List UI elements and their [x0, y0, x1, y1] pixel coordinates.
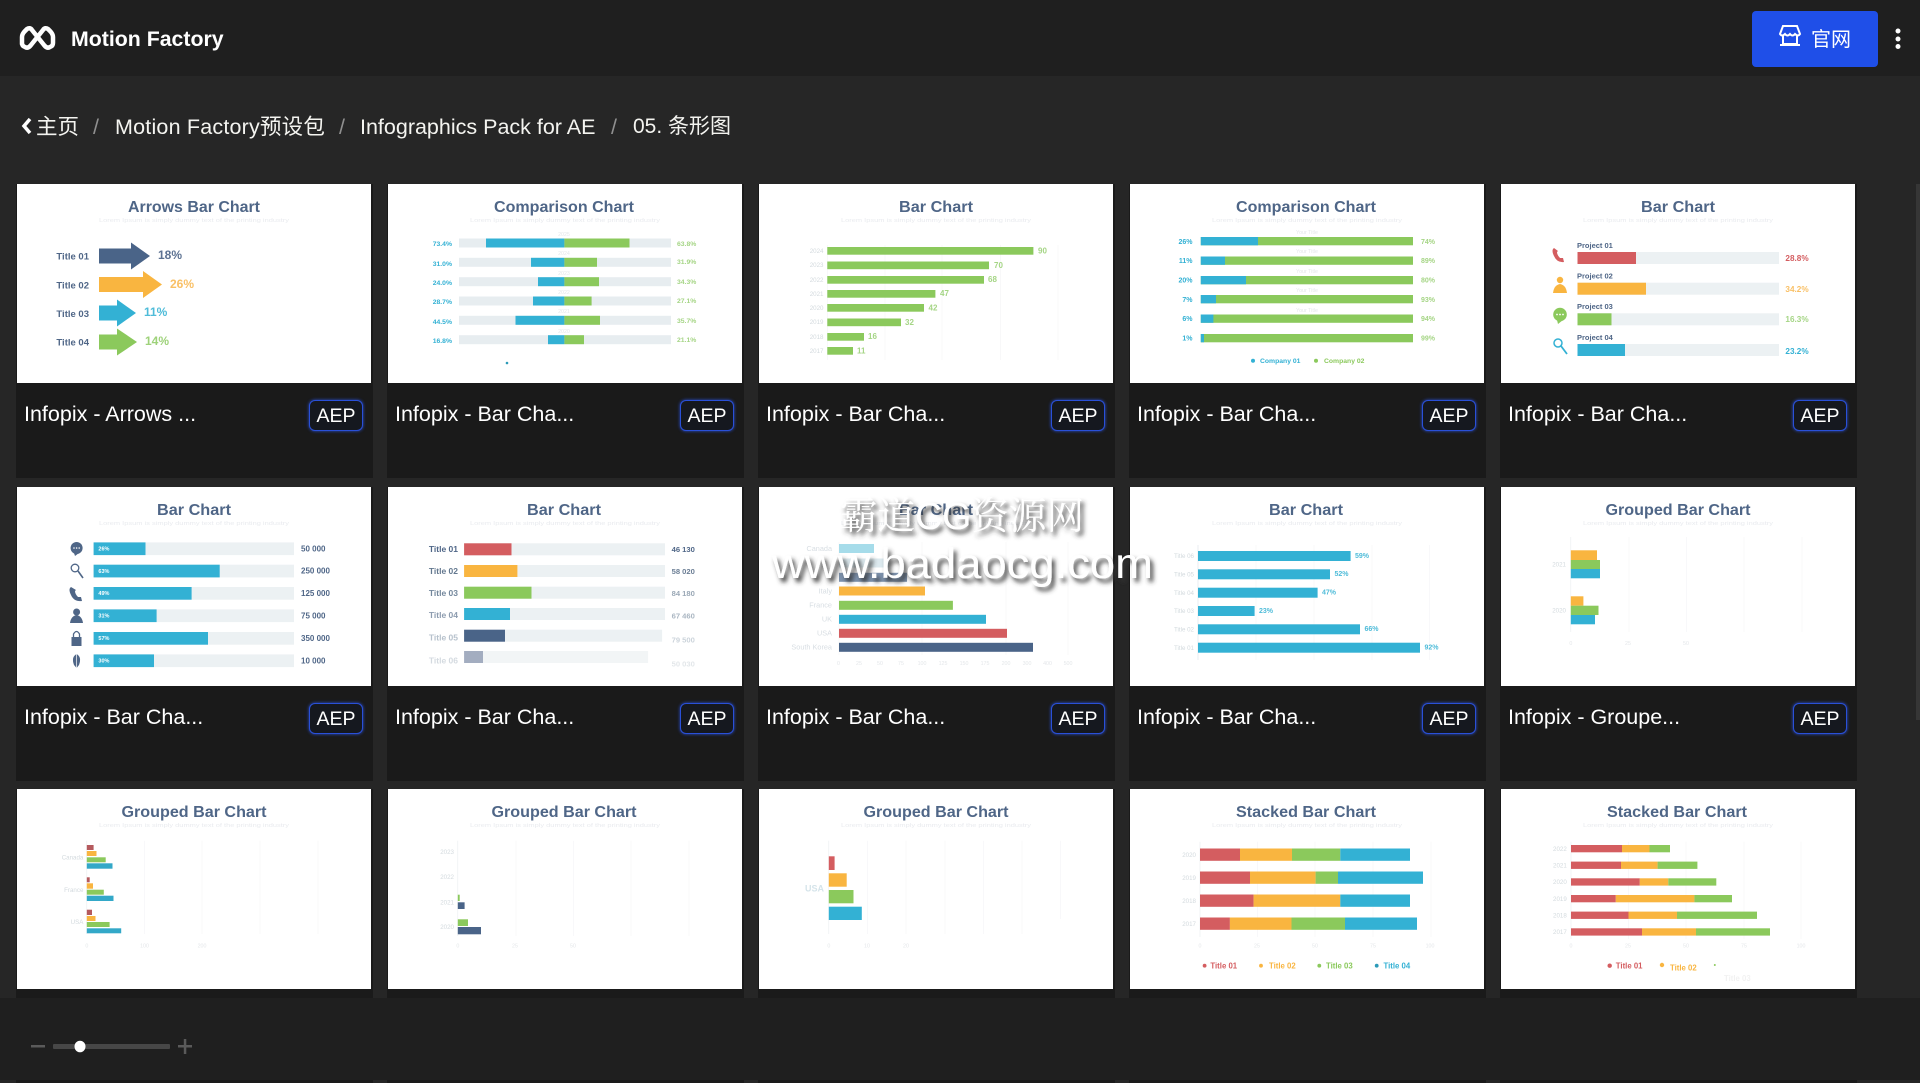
- icon: more menu: [1896, 28, 1900, 49]
- chart: green bars by year: 2023: [810, 262, 824, 269]
- chart: multi colour titled bars: Title 02: [429, 566, 458, 576]
- chart: countries multi colour bars: Italy: [819, 586, 832, 596]
- chart: green bars by year: [759, 184, 1113, 383]
- chart: grouped bars 2021 and 2020: [1501, 487, 1855, 686]
- chart: centered comparison bars: 2024: [558, 251, 570, 257]
- chart: two company comparison: 80%: [1421, 278, 1436, 284]
- chart: two company comparison: 74%: [1421, 239, 1436, 246]
- chart: blue percent bars with icons: 75 000: [301, 612, 326, 620]
- card: arrows bar chart: [16, 184, 373, 478]
- chart: grouped bars single USA group: 20: [903, 944, 909, 950]
- AEP badge: AEP: [687, 405, 727, 427]
- button label: 官网: [1811, 29, 1851, 51]
- chart: green bars by year: 11: [857, 346, 866, 356]
- chart title: Bar Chart: [527, 502, 601, 519]
- chart: countries multi colour bars: 25: [856, 661, 862, 667]
- AEP badge: AEP: [1058, 708, 1098, 730]
- chart: green bars by year: 90: [1038, 246, 1047, 256]
- chart: blue percent bars with icons: 250 000: [301, 566, 330, 576]
- chart: stacked bars 2017 to 2020: 2018: [1182, 898, 1197, 905]
- chart: grouped bars single USA group: 0: [827, 944, 830, 950]
- bottom zoom bar: [0, 998, 1920, 1080]
- chart: centered comparison bars: 2022: [558, 290, 570, 296]
- chart: two company comparison: Your Title: [1296, 288, 1318, 294]
- chart: arrows bar chart: Lorem Ipsum is simply dummy text of the printing industry: [99, 218, 290, 224]
- chart: blue percent bars with icons: 50 000: [301, 544, 326, 554]
- chart: project bars with icons: 28.8%: [1785, 254, 1809, 263]
- chart: green bars by year: 70: [994, 261, 1003, 270]
- chart: multi colour titled bars: 58 020: [672, 567, 695, 576]
- chart: grouped bars single USA group: USA: [805, 884, 824, 894]
- chart: arrows bar chart: Title 04: [56, 338, 90, 348]
- chart: blue bars with percent: [1130, 487, 1484, 686]
- chart: stacked bars 2017 to 2022: Title 01: [1616, 962, 1643, 970]
- chart: green bars by year: 2020: [810, 305, 824, 312]
- chart: centered comparison bars: 73.4%: [433, 241, 452, 248]
- separator: /: [93, 115, 99, 139]
- chart: multi colour titled bars: 79 500: [672, 636, 695, 644]
- chart: project bars with icons: Project 01: [1577, 241, 1613, 250]
- chart: grouped bars Canada France USA: [17, 789, 371, 989]
- chart: multi colour titled bars: [388, 487, 742, 686]
- chart: blue bars with percent: 59%: [1355, 553, 1370, 560]
- logo icon: [20, 26, 56, 50]
- chart: blue percent bars with icons: 49%: [98, 591, 110, 597]
- chart: multi colour titled bars: Lorem Ipsum is simply dummy text of the printing industry: [470, 521, 661, 527]
- chart title: Comparison Chart: [1236, 199, 1376, 216]
- chart: blue bars with percent: 23%: [1259, 608, 1274, 615]
- chart: arrows bar chart: 14%: [145, 334, 169, 348]
- chart: two company comparison: Your Title: [1296, 308, 1318, 314]
- card title: Infopix - Groupe...: [1508, 705, 1680, 729]
- chart: green bars by year: 2022: [810, 277, 824, 284]
- chart: centered comparison bars: Lorem Ipsum is simply dummy text of the printing industry: [470, 218, 661, 224]
- chart title: Bar Chart: [899, 199, 973, 216]
- chart: grouped bars Canada France USA: Lorem Ipsum is simply dummy text of the printing industry: [99, 823, 290, 829]
- chart: stacked bars 2017 to 2020: 2017: [1182, 921, 1197, 928]
- card: stacked bars four series: [1129, 789, 1486, 1083]
- chart: multi colour titled bars: Title 04: [429, 610, 458, 620]
- chart: stacked bars 2017 to 2020: 50: [1312, 944, 1318, 950]
- chart: centered comparison bars: 24.0%: [433, 280, 452, 287]
- chart: project bars with icons: Project 04: [1577, 333, 1614, 342]
- AEP badge: [1422, 703, 1476, 734]
- AEP badge: AEP: [316, 405, 356, 427]
- icon: back chevron: [22, 118, 32, 134]
- chart title: Bar Chart: [899, 502, 973, 519]
- chart: two company comparison: 11%: [1179, 258, 1193, 265]
- AEP badge: [1051, 703, 1105, 734]
- chart: stacked bars 2017 to 2020: 25: [1254, 944, 1260, 950]
- chart: blue bars with percent: Title 01: [1174, 645, 1195, 652]
- chart: arrows bar chart: [17, 184, 371, 383]
- chart: blue bars with percent: 52%: [1334, 571, 1349, 578]
- chart title: Grouped Bar Chart: [1606, 502, 1750, 519]
- chart: stacked bars 2017 to 2022: 100: [1797, 944, 1805, 950]
- chart: centered comparison bars: 2025: [558, 232, 570, 238]
- AEP badge: [680, 703, 734, 734]
- chart: multi colour titled bars: 84 180: [672, 589, 695, 598]
- chart: blue percent bars with icons: 30%: [98, 658, 110, 664]
- chart: multi colour titled bars: 67 460: [672, 612, 695, 620]
- chart title: Grouped Bar Chart: [122, 804, 266, 821]
- chart: green bars by year: 2018: [810, 334, 824, 341]
- card: stacked bars three series: [1500, 789, 1857, 1083]
- chart: grouped bars 2021 and 2020: Lorem Ipsum is simply dummy text of the printing industry: [1583, 521, 1774, 527]
- chart: grouped bars 2020 to 2023: 2022: [440, 874, 455, 881]
- chart: stacked bars 2017 to 2022: 2022: [1553, 846, 1567, 853]
- chart: grouped bars 2020 to 2023: 50: [570, 944, 576, 950]
- chart: grouped bars 2021 and 2020: 2021: [1552, 562, 1567, 568]
- chart: stacked bars 2017 to 2020: Title 04: [1384, 962, 1411, 970]
- chart: green bars by year: 2021: [810, 291, 824, 298]
- chart: two company comparison: 6%: [1182, 316, 1193, 323]
- chart: centered comparison bars: 28.7%: [433, 299, 452, 306]
- chart: grouped bars 2020 to 2023: Lorem Ipsum is simply dummy text of the printing industry: [470, 823, 661, 829]
- chart: arrows bar chart: Title 03: [56, 309, 89, 320]
- chart: centered comparison bars: 31.0%: [433, 261, 452, 268]
- chart: blue percent bars with icons: 57%: [98, 636, 110, 642]
- AEP badge: [309, 703, 363, 734]
- chart title: Grouped Bar Chart: [864, 804, 1008, 821]
- chart: green bars by year: 16: [868, 332, 877, 341]
- scrollbar: [1916, 184, 1920, 720]
- chart: centered comparison bars: 2021: [558, 309, 570, 315]
- chart: grouped bars 2021 and 2020: 2020: [1552, 608, 1567, 614]
- chart: blue percent bars with icons: [17, 487, 371, 686]
- chart: project bars with icons: [1501, 184, 1855, 383]
- chart: two company comparison: 89%: [1421, 258, 1436, 265]
- chart: countries multi colour bars: 75: [898, 661, 904, 667]
- chart: centered comparison bars: 44.5%: [433, 319, 452, 326]
- card: country bar chart: [758, 487, 1115, 781]
- chart: grouped bars 2020 to 2023: 2023: [440, 849, 455, 856]
- AEP badge: AEP: [1429, 708, 1469, 730]
- chart: countries multi colour bars: Canada: [806, 544, 833, 553]
- chart: grouped bars 2021 and 2020: 0: [1569, 641, 1572, 647]
- card: grouped bars by year: [387, 789, 744, 1083]
- card: blue title bars 1: [1129, 487, 1486, 781]
- AEP badge: AEP: [687, 708, 727, 730]
- chart: multi colour titled bars: Title 01: [429, 544, 458, 554]
- AEP badge: AEP: [1800, 708, 1840, 730]
- chart: two company comparison: 26%: [1178, 239, 1193, 246]
- chart: blue bars with percent: 92%: [1424, 644, 1439, 652]
- chart: blue bars with percent: Title 04: [1174, 590, 1195, 597]
- card title: Infopix - Bar Cha...: [1508, 402, 1687, 426]
- chart: grouped bars 2020 to 2023: [388, 789, 742, 989]
- breadcrumb pack: Motion Factory预设包: [115, 115, 325, 139]
- chart: stacked bars 2017 to 2022: 2019: [1553, 896, 1567, 903]
- chart: green bars by year: 2019: [810, 319, 824, 326]
- chart: green bars by year: 32: [905, 318, 914, 327]
- chart: centered comparison bars: 63.8%: [677, 241, 696, 248]
- card title: Infopix - Arrows ...: [24, 402, 196, 426]
- AEP badge: [680, 400, 734, 431]
- chart: countries multi colour bars: UK: [822, 614, 832, 624]
- chart: multi colour titled bars: Title 03: [429, 588, 458, 598]
- chart: project bars with icons: Lorem Ipsum is simply dummy text of the printing industry: [1583, 218, 1774, 224]
- chart: blue percent bars with icons: 31%: [98, 614, 110, 620]
- chart: green bars by year: 2017: [810, 348, 824, 355]
- chart: grouped bars Canada France USA: 200: [198, 944, 206, 950]
- chart: multi colour titled bars: Title 06: [429, 656, 458, 666]
- chart: grouped bars 2021 and 2020: 25: [1625, 641, 1631, 647]
- card title: Infopix - Bar Cha...: [766, 402, 945, 426]
- chart: stacked bars 2017 to 2020: Title 03: [1326, 962, 1353, 970]
- chart: stacked bars 2017 to 2020: 100: [1426, 944, 1434, 950]
- chart: stacked bars 2017 to 2022: 2018: [1553, 912, 1567, 920]
- chart: stacked bars 2017 to 2022: Title 02: [1670, 964, 1697, 972]
- chart: two company comparison: 1%: [1182, 336, 1193, 342]
- chart: stacked bars 2017 to 2022: 2020: [1553, 879, 1567, 886]
- chart: centered comparison bars: 21.1%: [677, 337, 696, 344]
- chart: blue bars with percent: 47%: [1322, 590, 1337, 596]
- chart: centered comparison bars: 2023: [558, 271, 570, 277]
- card: fading multi-colour bars: [387, 487, 744, 781]
- chart: countries multi colour bars: USA: [817, 628, 832, 638]
- chart: two company comparison: Your Title: [1296, 249, 1318, 255]
- chart: blue bars with percent: 66%: [1364, 626, 1379, 633]
- top navigation bar: [0, 0, 1920, 76]
- chart: stacked bars 2017 to 2022: 50: [1683, 944, 1689, 950]
- chart: two company comparison: 93%: [1421, 297, 1436, 304]
- chart: two company comparison: 99%: [1421, 336, 1436, 342]
- chart title: Bar Chart: [1641, 199, 1715, 216]
- chart: centered comparison bars: 16.8%: [433, 338, 452, 345]
- chart: grouped bars Canada France USA: Canada: [62, 854, 84, 862]
- chart: arrows bar chart: Title 02: [56, 280, 89, 292]
- chart: two company comparison: 94%: [1421, 316, 1436, 323]
- chart: grouped bars 2021 and 2020: 50: [1683, 641, 1689, 647]
- chart: countries multi colour bars: South Korea: [791, 642, 833, 652]
- chart: countries multi colour bars: 500: [1064, 661, 1072, 667]
- chart: blue bars with percent: Title 05: [1174, 572, 1195, 578]
- chart: countries multi colour bars: 100: [918, 661, 926, 667]
- website button: [1752, 11, 1878, 67]
- chart: two company comparison: 20%: [1178, 278, 1193, 284]
- AEP badge: AEP: [1058, 405, 1098, 427]
- chart: centered comparison bars: 35.7%: [677, 318, 696, 325]
- card: comparison chart 2: [1129, 184, 1486, 478]
- chart: stacked bars 2017 to 2022: 2021: [1553, 862, 1567, 870]
- chart: blue percent bars with icons: 10 000: [301, 656, 326, 666]
- chart: stacked bars 2017 to 2020: Title 01: [1210, 962, 1238, 970]
- chart: blue bars with percent: Title 02: [1174, 626, 1195, 634]
- chart: two company comparison: Lorem Ipsum is simply dummy text of the printing industry: [1212, 218, 1403, 224]
- chart: grouped bars 2020 to 2023: 25: [512, 944, 518, 950]
- card title: Infopix - Bar Cha...: [395, 705, 574, 729]
- chart: stacked bars 2017 to 2020: Lorem Ipsum is simply dummy text of the printing industry: [1212, 823, 1403, 829]
- chart: project bars with icons: 23.2%: [1785, 347, 1809, 356]
- chart: stacked bars 2017 to 2022: [1501, 789, 1855, 989]
- chart: project bars with icons: 34.2%: [1785, 285, 1809, 294]
- card title: Infopix - Bar Cha...: [766, 705, 945, 729]
- chart: grouped bars Canada France USA: USA: [71, 919, 84, 926]
- zoom slider: [31, 1039, 192, 1054]
- chart: centered comparison bars: 27.1%: [677, 298, 696, 305]
- chart: two company comparison: Company 01: [1260, 358, 1301, 365]
- chart: stacked bars 2017 to 2022: 25: [1625, 944, 1631, 950]
- chart: grouped bars Canada France USA: 100: [140, 944, 149, 950]
- card title: Infopix - Bar Cha...: [1137, 402, 1316, 426]
- card: grouped bars by country: [16, 789, 373, 1083]
- chart: stacked bars 2017 to 2020: Title 02: [1269, 962, 1296, 970]
- AEP badge: AEP: [1800, 405, 1840, 427]
- card: grouped bar chart 1: [1500, 487, 1857, 781]
- chart: stacked bars 2017 to 2022: Title 03: [1724, 974, 1751, 983]
- chart: arrows bar chart: 11%: [144, 305, 168, 319]
- chart title: Arrows Bar Chart: [128, 199, 260, 216]
- chart: blue bars with percent: Title 06: [1174, 553, 1195, 560]
- chart: stacked bars 2017 to 2020: 0: [1199, 944, 1202, 950]
- chart: countries multi colour bars: France: [809, 600, 832, 610]
- chart: countries multi colour bars: [759, 487, 1113, 686]
- card: comparison chart 1: [387, 184, 744, 478]
- chart: centered comparison bars: 31.9%: [677, 259, 696, 266]
- card: grouped bars USA: [758, 789, 1115, 1083]
- breadcrumb infographics: Infographics Pack for AE: [360, 115, 595, 139]
- AEP badge: [309, 400, 363, 431]
- breadcrumb home: 主页: [36, 115, 79, 139]
- card title: Infopix - Bar Cha...: [395, 402, 574, 426]
- chart: centered comparison bars: [388, 184, 742, 383]
- chart: stacked bars 2017 to 2020: 2020: [1182, 852, 1197, 859]
- card title: Infopix - Bar Cha...: [24, 705, 203, 729]
- chart: grouped bars 2020 to 2023: 2020: [440, 924, 455, 931]
- chart: blue percent bars with icons: 26%: [98, 546, 110, 552]
- chart: countries multi colour bars: 300: [1023, 661, 1031, 667]
- chart: blue percent bars with icons: 125 000: [301, 589, 330, 598]
- chart title: Bar Chart: [157, 502, 231, 519]
- AEP badge: [1793, 703, 1847, 734]
- chart: arrows bar chart: 26%: [170, 277, 194, 291]
- card title: Infopix - Bar Cha...: [1137, 705, 1316, 729]
- watermark: www.badaocg.com: [771, 540, 1153, 588]
- chart: grouped bars 2020 to 2023: 2021: [440, 899, 455, 906]
- AEP badge: AEP: [1429, 405, 1469, 427]
- chart: multi colour titled bars: 50 030: [672, 660, 695, 668]
- AEP badge: [1051, 400, 1105, 431]
- chart: two company comparison: Your Title: [1296, 230, 1318, 236]
- chart title: Grouped Bar Chart: [492, 804, 636, 821]
- chart title: Stacked Bar Chart: [1607, 804, 1747, 821]
- chart: stacked bars 2017 to 2022: 2017: [1553, 929, 1567, 936]
- chart: project bars with icons: 16.3%: [1785, 315, 1809, 324]
- chart: arrows bar chart: Title 01: [56, 252, 90, 262]
- card: blue bars with icons: [16, 487, 373, 781]
- chart: blue percent bars with icons: 63%: [98, 569, 110, 575]
- chart: stacked bars 2017 to 2022: 0: [1570, 944, 1573, 950]
- chart: grouped bars single USA group: Lorem Ipsum is simply dummy text of the printing industry: [841, 823, 1032, 829]
- AEP badge: [1422, 400, 1476, 431]
- chart: centered comparison bars: 34.3%: [677, 279, 696, 286]
- chart: grouped bars single USA group: [759, 789, 1113, 989]
- icon: store: [1778, 25, 1802, 46]
- chart: countries multi colour bars: 200: [1002, 661, 1010, 667]
- watermark: 霸道CG资源网: [840, 496, 1084, 538]
- chart: blue percent bars with icons: Lorem Ipsum is simply dummy text of the printing industry: [99, 521, 290, 527]
- chart: stacked bars 2017 to 2020: 2019: [1182, 875, 1197, 882]
- chart: two company comparison: Your Title: [1296, 269, 1318, 275]
- chart: countries multi colour bars: 150: [960, 661, 968, 667]
- chart: countries multi colour bars: 175: [981, 661, 989, 667]
- brand name: Motion Factory: [71, 27, 224, 51]
- chart title: Comparison Chart: [494, 199, 634, 216]
- chart: green bars by year: 47: [940, 289, 949, 298]
- chart: grouped bars Canada France USA: France: [64, 887, 84, 894]
- chart: centered comparison bars: 2020: [558, 329, 570, 335]
- separator: /: [339, 115, 345, 139]
- chart: project bars with icons: Project 02: [1577, 272, 1613, 280]
- chart: countries multi colour bars: 400: [1043, 661, 1052, 667]
- chart: two company comparison: 7%: [1182, 297, 1193, 304]
- chart: arrows bar chart: 18%: [158, 248, 182, 262]
- chart: grouped bars single USA group: 10: [864, 944, 870, 950]
- chart: stacked bars 2017 to 2022: Lorem Ipsum is simply dummy text of the printing industry: [1583, 823, 1774, 829]
- AEP badge: AEP: [316, 708, 356, 730]
- card: project bar chart with icons: [1500, 184, 1857, 478]
- chart: blue bars with percent: Title 03: [1174, 608, 1195, 615]
- chart: countries multi colour bars: Lorem Ipsum is simply dummy text of the printing industry: [841, 521, 1032, 527]
- chart: stacked bars 2017 to 2022: 75: [1741, 944, 1747, 950]
- chart: stacked bars 2017 to 2020: [1130, 789, 1484, 989]
- chart: stacked bars 2017 to 2020: 75: [1370, 944, 1376, 950]
- AEP badge: [1793, 400, 1847, 431]
- separator: /: [611, 115, 617, 139]
- breadcrumb current: 05. 条形图: [633, 115, 731, 138]
- card: green bar chart: [758, 184, 1115, 478]
- chart: multi colour titled bars: Title 05: [429, 632, 458, 642]
- chart: multi colour titled bars: 46 130: [672, 545, 695, 554]
- chart: blue bars with percent: Lorem Ipsum is simply dummy text of the printing industry: [1212, 521, 1403, 527]
- chart: countries multi colour bars: 125: [939, 661, 947, 667]
- chart: countries multi colour bars: 50: [877, 661, 883, 667]
- chart title: Bar Chart: [1269, 502, 1343, 519]
- chart: grouped bars Canada France USA: 0: [85, 944, 88, 950]
- chart title: Stacked Bar Chart: [1236, 804, 1376, 821]
- chart: grouped bars 2020 to 2023: 0: [456, 944, 459, 950]
- chart: two company comparison: Company 02: [1324, 358, 1365, 365]
- chart: project bars with icons: Project 03: [1577, 302, 1613, 311]
- chart: green bars by year: Lorem Ipsum is simply dummy text of the printing industry: [841, 218, 1032, 224]
- chart: green bars by year: 2024: [810, 248, 824, 255]
- breadcrumb: [22, 115, 731, 139]
- chart: green bars by year: 42: [928, 304, 938, 312]
- chart: countries multi colour bars: 0: [837, 661, 840, 667]
- chart: blue percent bars with icons: 350 000: [301, 634, 330, 643]
- chart: green bars by year: 68: [988, 275, 997, 284]
- chart: two company comparison: [1130, 184, 1484, 383]
